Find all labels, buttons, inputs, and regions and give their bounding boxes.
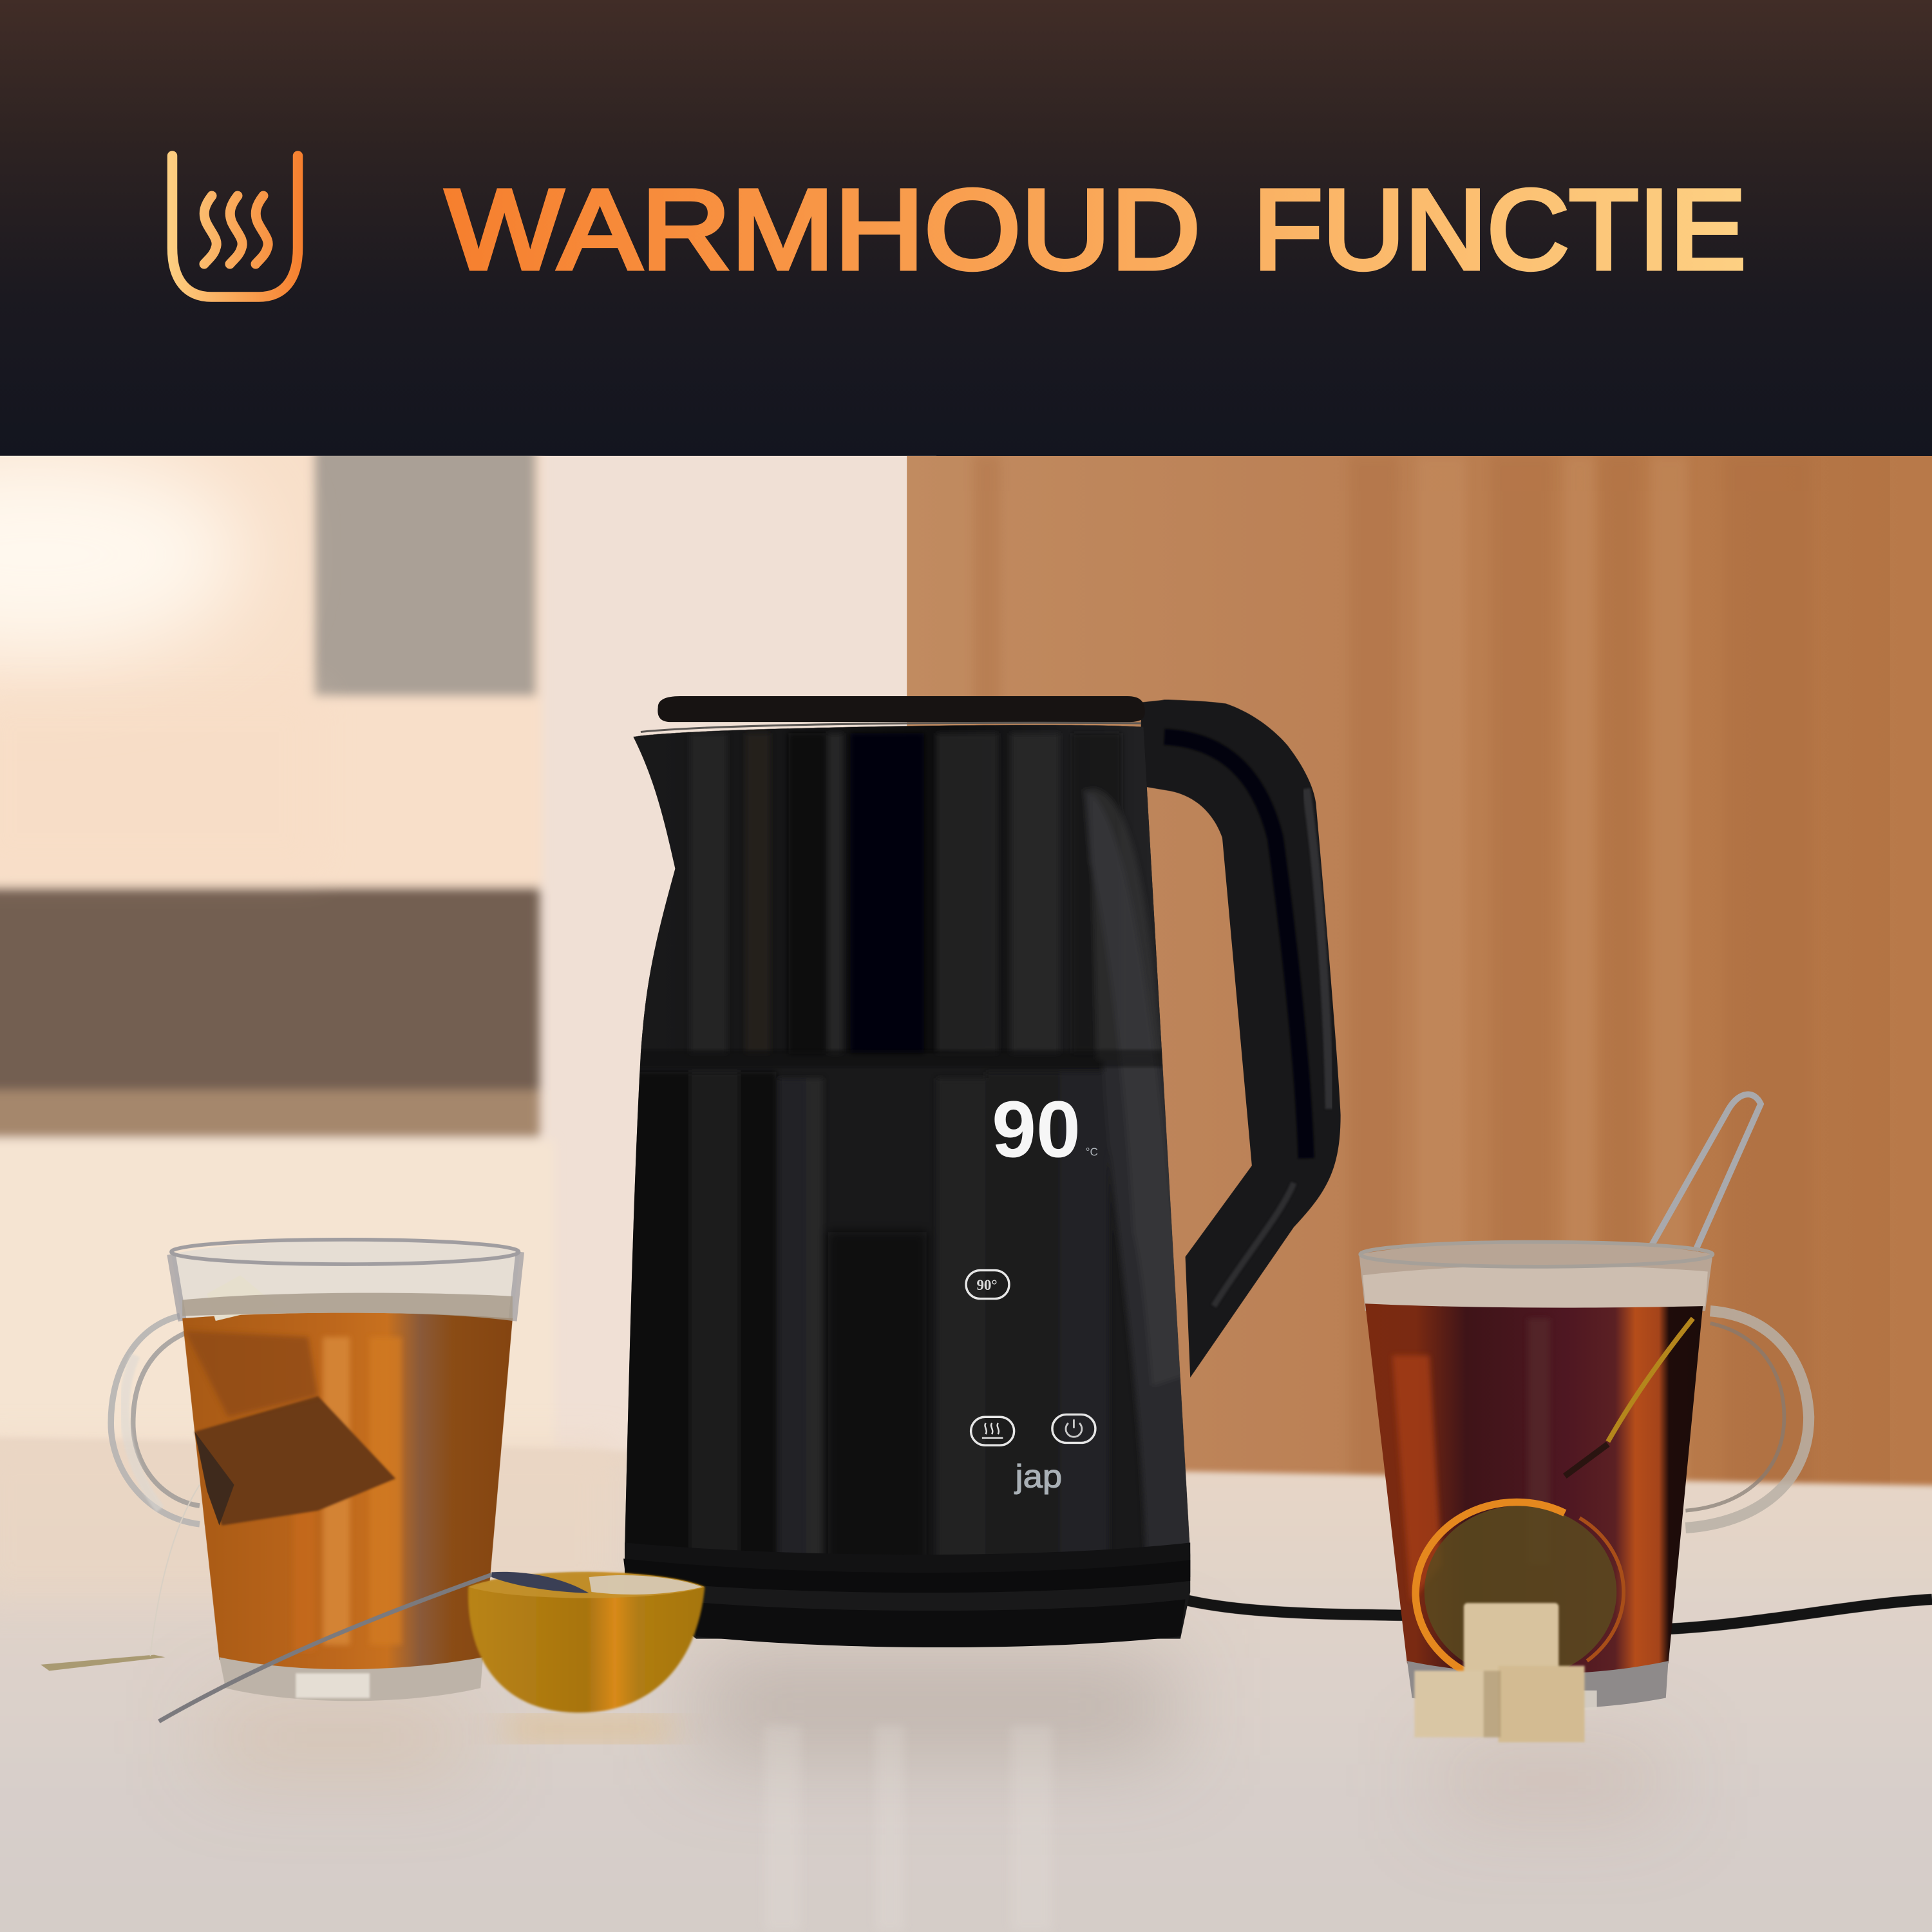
kettle body — [625, 725, 1190, 1639]
kettle base — [625, 1542, 1190, 1589]
button: 90 degrees: 90° — [976, 1277, 998, 1293]
power cord — [1183, 1599, 1932, 1629]
bag top above tea — [207, 1275, 277, 1321]
title — [446, 167, 1746, 293]
body reflections — [616, 721, 1208, 1571]
temperature display: 90 — [992, 1085, 1081, 1175]
left tea glass — [41, 1240, 520, 1701]
glass base — [220, 1657, 483, 1701]
foam — [1363, 1265, 1708, 1308]
tea tag — [41, 1655, 165, 1671]
spoon — [159, 1572, 589, 1721]
button: 90 degrees — [966, 1271, 1009, 1299]
foam line — [182, 1293, 513, 1321]
button: power — [1052, 1414, 1095, 1443]
tea — [182, 1313, 513, 1672]
button: keep warm — [971, 1417, 1014, 1445]
counter top — [0, 1437, 1932, 1932]
title: WARMHOUD — [446, 167, 1200, 293]
title: FUNCTIE — [1253, 167, 1746, 293]
temperature display: °C — [1086, 1146, 1098, 1159]
background wall and shelf — [0, 444, 936, 1553]
glass handle — [111, 1316, 200, 1524]
product photo scene — [0, 444, 1932, 1932]
glass upper wall — [1359, 1242, 1712, 1311]
brand logo: jap — [1014, 1458, 1062, 1494]
icon: keep warm steam in cup — [173, 156, 298, 297]
glass base — [1407, 1661, 1669, 1709]
glass rim — [171, 1240, 518, 1264]
glass upper wall — [171, 1240, 520, 1321]
kettle — [616, 696, 1341, 1647]
right tea glass — [1359, 1094, 1809, 1710]
tea — [1365, 1303, 1703, 1676]
kettle lid — [658, 696, 1145, 722]
strainer ball — [1416, 1502, 1624, 1678]
kettle handle — [1141, 700, 1341, 1378]
strainer handle — [1649, 1094, 1761, 1251]
glass handle — [1685, 1311, 1809, 1528]
tea bag — [194, 1396, 395, 1526]
glass rim — [1360, 1242, 1712, 1267]
wood panel — [907, 456, 1932, 1503]
honey bowl — [468, 1572, 705, 1712]
sugar cubes — [1414, 1603, 1584, 1742]
header band — [0, 0, 1932, 456]
